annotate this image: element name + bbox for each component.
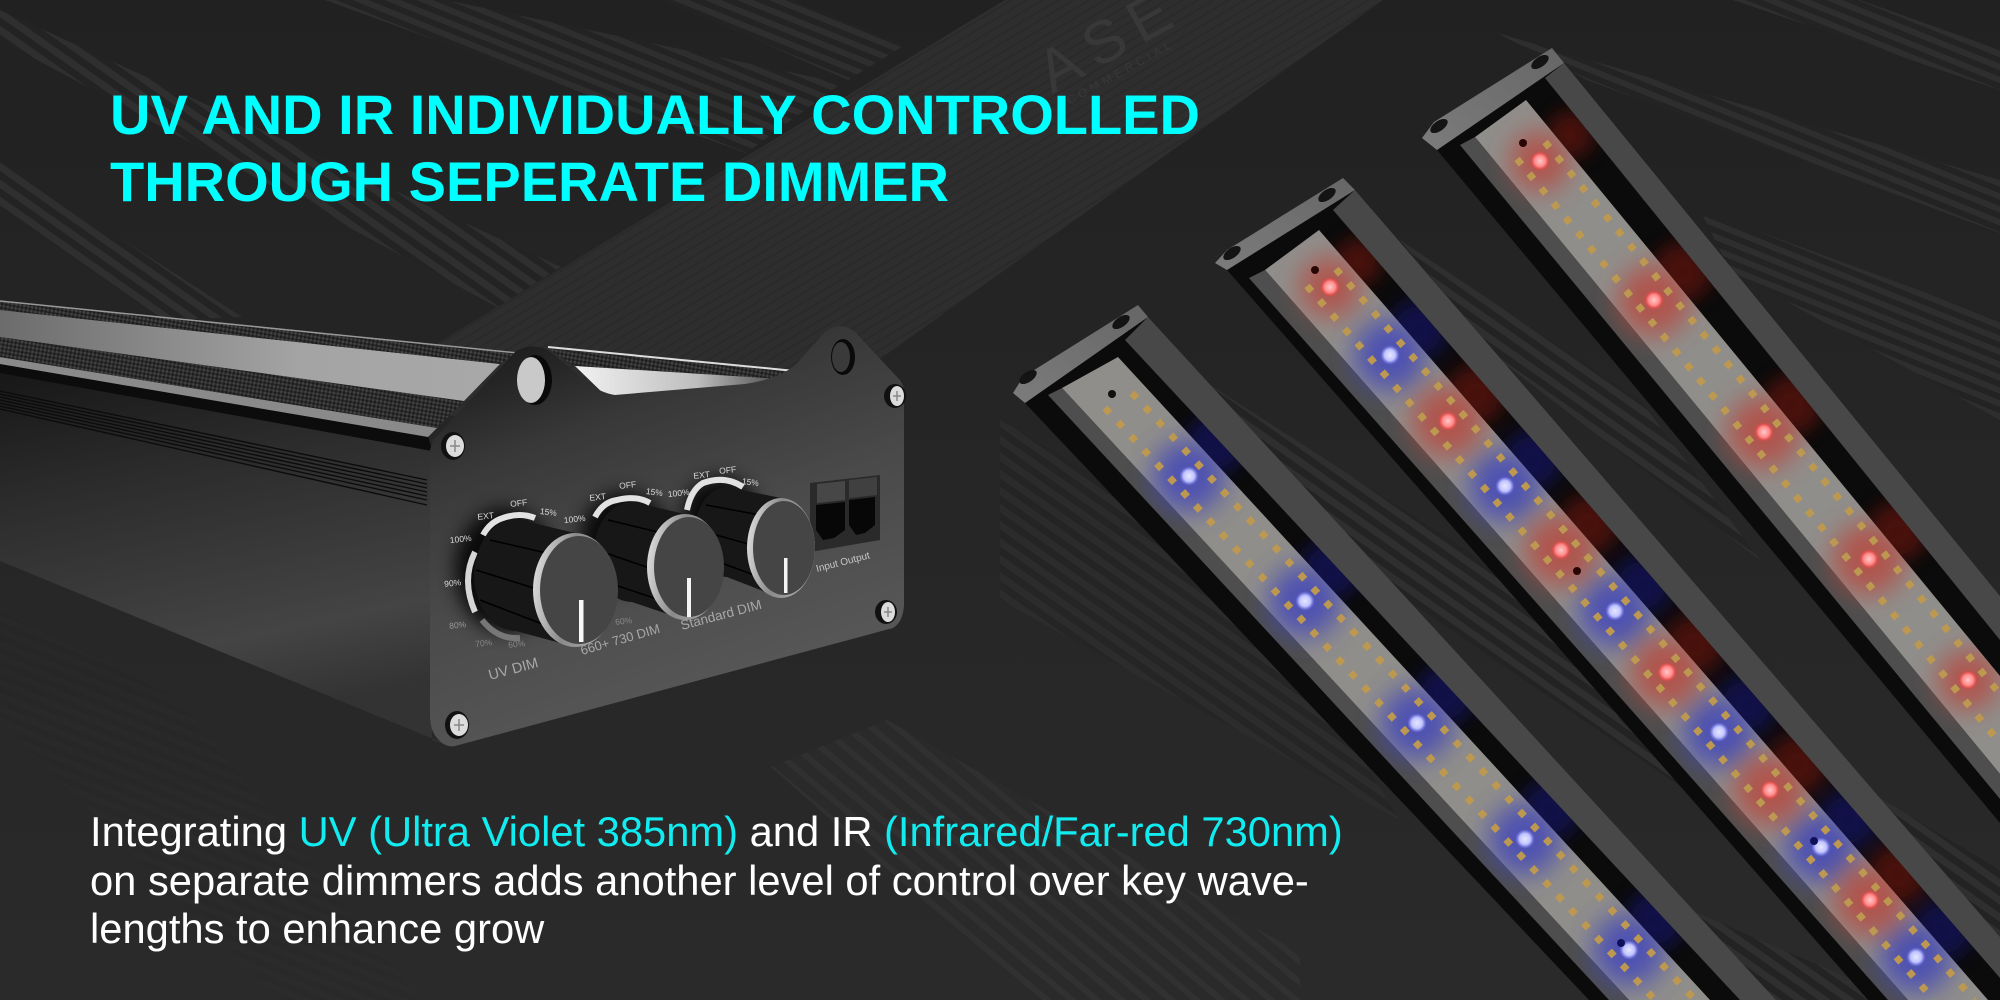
dial scale labels: 100% bbox=[449, 533, 472, 545]
red LEDs bbox=[1519, 139, 1978, 690]
white LED chips bbox=[1307, 269, 1974, 1000]
left flange bbox=[1048, 388, 1629, 1000]
background striped bands top left bbox=[0, 0, 905, 320]
dial scale labels: EXT bbox=[693, 469, 710, 481]
LED board bbox=[1265, 230, 1988, 1000]
LED board bbox=[1062, 357, 1710, 1000]
label: 660+ 730 DIM: 660+ 730 DIM bbox=[579, 621, 662, 658]
label: Input Output: Input Output bbox=[815, 550, 871, 575]
dial scale labels: 80% bbox=[449, 619, 467, 631]
screws bbox=[441, 384, 906, 739]
LED fixture head with control plate bbox=[0, 301, 906, 747]
dial scale labels: 60% bbox=[508, 638, 526, 650]
fixture side body bbox=[0, 301, 518, 747]
dial scale labels: 70% bbox=[475, 637, 493, 649]
LED bar: left strip bbox=[1013, 305, 1776, 1000]
background striped bands centre bbox=[1000, 240, 2000, 1000]
dial scale labels: 60% bbox=[615, 615, 633, 627]
white LED chips bbox=[1517, 142, 2000, 743]
dial scale labels: OFF bbox=[619, 479, 637, 491]
LED bar: right strip bbox=[1422, 48, 2000, 823]
dial scale labels: 90% bbox=[444, 577, 462, 589]
black housing bbox=[1227, 190, 2000, 1000]
LED bar: middle strip bbox=[1215, 178, 2000, 1000]
blue glow bbox=[1354, 319, 1952, 993]
left flange bbox=[1249, 270, 1908, 1000]
knob shadows bbox=[455, 477, 758, 632]
front control plate bbox=[430, 326, 904, 746]
red glow bbox=[1300, 257, 1906, 936]
black housing bbox=[1437, 63, 2000, 823]
dial scale labels: OFF bbox=[719, 464, 737, 476]
ports bbox=[810, 475, 880, 552]
mounting holes bbox=[517, 339, 855, 405]
UV LEDs bbox=[1108, 390, 1639, 960]
dial scale labels bbox=[444, 464, 760, 650]
channel colour glow bbox=[1185, 415, 1685, 950]
red glow bbox=[1510, 131, 1998, 710]
left flange bbox=[1460, 137, 2000, 799]
white LED chips bbox=[1105, 393, 1695, 1000]
background fixture bar bbox=[400, 0, 1383, 416]
dial scale labels: 15% bbox=[539, 506, 558, 518]
knob: 660+730 dim bbox=[594, 502, 724, 620]
background striped bands lower centre bbox=[0, 610, 1300, 1000]
dial scale labels: EXT bbox=[477, 510, 494, 522]
dial scale labels: 15% bbox=[645, 486, 664, 498]
black housing bbox=[1025, 317, 1776, 1000]
dial scale labels: OFF bbox=[510, 497, 528, 509]
description text: Integrating UV (Ultra Violet 385nm) and IR (Infrared/Far-red 730nm) bbox=[90, 808, 1343, 855]
right side face bbox=[1125, 317, 1776, 1000]
faint fixture logo: COMMERCIAL bbox=[1064, 36, 1177, 108]
end cap bbox=[1013, 305, 1148, 403]
end cap bbox=[1422, 48, 1564, 150]
label: UV DIM: UV DIM bbox=[487, 655, 540, 684]
channel glows bbox=[1546, 111, 1927, 562]
title: UV AND IR INDIVIDUALLY CONTROLLED bbox=[110, 83, 1200, 146]
right side face bbox=[1333, 190, 2000, 978]
description text: on separate dimmers adds another level of control over key wave- bbox=[90, 857, 1309, 904]
background striped bands top right bbox=[1497, 0, 2000, 420]
dial scale arcs bbox=[468, 480, 743, 638]
top surface seen behind plate bbox=[548, 347, 795, 400]
end cap bbox=[1215, 178, 1355, 270]
dial scale labels: 100% bbox=[563, 513, 586, 525]
right side face bbox=[1545, 63, 2000, 640]
label: Standard DIM: Standard DIM bbox=[679, 597, 763, 633]
channel glows bbox=[1334, 238, 1973, 960]
knob: standard dim bbox=[695, 487, 815, 598]
side grooves bbox=[0, 391, 427, 505]
knob: UV dim bbox=[474, 519, 618, 647]
LED board bbox=[1475, 100, 2000, 774]
dial scale labels: 15% bbox=[741, 476, 760, 488]
dial scale labels: 100% bbox=[667, 487, 690, 499]
board colour glow bbox=[1153, 440, 1665, 986]
red and UV LEDs bbox=[1311, 266, 1926, 967]
title: THROUGH SEPERATE DIMMER bbox=[110, 150, 949, 213]
description text: lengths to enhance grow bbox=[90, 905, 545, 952]
dial scale labels: EXT bbox=[589, 491, 606, 503]
